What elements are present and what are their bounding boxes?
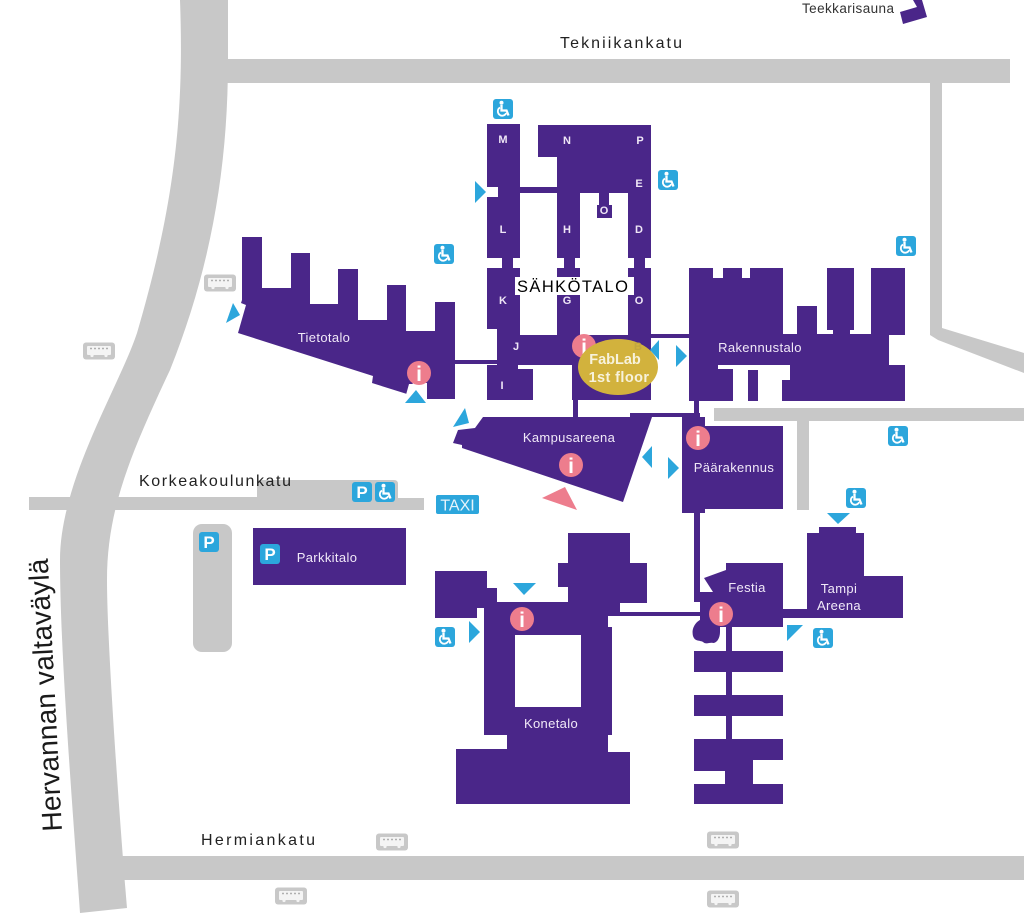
- info marker: Festia: [709, 602, 733, 627]
- accessibility icon 1: [493, 99, 513, 119]
- parking icon: street: P: [356, 483, 368, 502]
- info marker: Kampusareena: [559, 453, 583, 478]
- entrance arrow: Kampusareena north-west: [453, 408, 469, 427]
- building: Festia: [693, 513, 783, 804]
- road label: Korkeakoulunkatu: Korkeakoulunkatu: [139, 473, 291, 490]
- info marker: Festia: i: [718, 604, 724, 627]
- entrance arrow: Rakennustalo west: [676, 345, 687, 367]
- accessibility icon 9: [375, 482, 395, 502]
- parking icon: Parkkitalo: [260, 544, 280, 564]
- accessibility icon 5: [888, 426, 908, 446]
- road: east branch: [930, 83, 1024, 373]
- building: Sähkötalo: K: [499, 295, 507, 307]
- label: SÄHKÖTALO: SÄHKÖTALO: [517, 278, 628, 296]
- accessibility icon 4: [896, 236, 916, 256]
- building: Rakennustalo: Rakennustalo: [718, 340, 802, 355]
- entrance arrow: Sähkötalo west: [475, 181, 486, 203]
- bus stop 6: [707, 890, 739, 908]
- road: Hervannan valtaväylä: [60, 0, 228, 913]
- info marker: Sähkötalo: i: [581, 336, 587, 359]
- building: Kampusareena: [453, 413, 700, 502]
- building: Parkkitalo: Parkkitalo: [297, 550, 357, 565]
- building: Sähkötalo: O: [635, 295, 644, 307]
- building: Sähkötalo: L: [500, 224, 507, 236]
- FabLab highlight: FabLab: [589, 352, 641, 368]
- road: Hermiankatu: [122, 856, 1024, 880]
- taxi sign: [436, 495, 479, 514]
- entrance arrow: Sähkötalo east: [650, 340, 659, 360]
- building: Päärakennus: [682, 417, 783, 513]
- info marker: Sähkötalo: [572, 334, 596, 359]
- info marker: Konetalo: i: [519, 609, 525, 632]
- entrance arrow: Konetalo west: [469, 621, 480, 643]
- accessibility icon 2: [658, 170, 678, 190]
- building: Päärakennus: Päärakennus: [694, 460, 774, 475]
- road label: Hervannan valtaväylä: Hervannan valtaväylä: [23, 558, 68, 832]
- entrance arrow: Kampusareena east: [642, 446, 652, 468]
- info marker: Kampusareena: i: [568, 455, 574, 478]
- road label: Tekniikankatu: Tekniikankatu: [560, 35, 682, 52]
- parking icon: lot: P: [203, 533, 215, 552]
- accessibility icon 6: [846, 488, 866, 508]
- building: Sähkötalo: I: [500, 380, 504, 392]
- building: Sähkötalo: D: [635, 224, 643, 236]
- taxi sign: TAXI: [440, 498, 475, 514]
- road: Korkeakoulunkatu: [29, 480, 424, 510]
- building: Sähkötalo: O: [600, 205, 609, 217]
- building: Sähkötalo: P: [636, 135, 644, 147]
- accessibility icon 8: [435, 627, 455, 647]
- building: Kampusareena: Kampusareena: [523, 430, 616, 445]
- building: Tietotalo: [238, 237, 498, 399]
- building: Sähkötalo: N: [563, 135, 571, 147]
- bus stop 5: [707, 832, 739, 848]
- building: Festia: Festia: [728, 580, 766, 595]
- info marker: Päärakennus: i: [695, 428, 701, 451]
- info marker: Tietotalo: [404, 361, 431, 402]
- entrance arrow: Tietotalo south: [405, 390, 426, 403]
- label: Teekkarisauna: Teekkarisauna: [802, 1, 894, 16]
- building: Tampi Areena: Areena: [817, 598, 861, 613]
- info marker: Tietotalo: i: [416, 363, 422, 386]
- FabLab highlight: 1st floor: [589, 370, 649, 386]
- building: Sähkötalo: M: [498, 134, 508, 146]
- building: Konetalo: Konetalo: [524, 716, 578, 731]
- road label: Hermiankatu: Hermiankatu: [201, 832, 315, 849]
- accessibility icon 3: [434, 244, 454, 264]
- entrance arrow: Konetalo north: [513, 583, 536, 595]
- bus stop 1: [83, 342, 115, 360]
- info marker: Konetalo: [510, 607, 534, 632]
- road: Tekniikankatu: [226, 59, 1010, 83]
- building: Sähkötalo: H: [563, 224, 571, 236]
- accessibility icon 7: [813, 628, 833, 648]
- parking icon: lot: [199, 532, 219, 552]
- building: Sähkötalo: E: [635, 178, 643, 190]
- parking icon: street: [352, 482, 372, 502]
- FabLab highlight: B: [634, 341, 642, 353]
- building: Tampi Areena: Tampi: [821, 581, 857, 596]
- parking icon: Parkkitalo: P: [264, 545, 276, 564]
- building: Parkkitalo: [253, 528, 406, 585]
- road: middle service road: [714, 408, 1024, 510]
- building: Tietotalo: Tietotalo: [298, 330, 350, 345]
- bus stop 3: [376, 834, 408, 850]
- entrance arrow: Tietotalo west: [226, 303, 240, 323]
- building: Sähkötalo: G: [563, 295, 571, 307]
- parking lot: [193, 524, 232, 652]
- building: Sähkötalo: [487, 124, 690, 417]
- building: Teekkarisauna: [900, 0, 927, 24]
- entrance arrow: Päärakennus west: [668, 457, 679, 479]
- FabLab highlight: [578, 339, 658, 395]
- building: Konetalo: [435, 533, 700, 804]
- building: Rakennustalo: [689, 268, 905, 418]
- info marker: Päärakennus: [686, 426, 710, 451]
- entrance arrow: main pink: [542, 487, 577, 510]
- building: Sähkötalo: J: [513, 341, 519, 353]
- bus stop 2: [204, 274, 236, 292]
- bus stop 4: [275, 888, 307, 904]
- entrance arrow: Festia south-east: [787, 625, 803, 641]
- building: Tampi Areena: [783, 527, 903, 618]
- entrance arrow: Tampi Areena north: [827, 513, 850, 524]
